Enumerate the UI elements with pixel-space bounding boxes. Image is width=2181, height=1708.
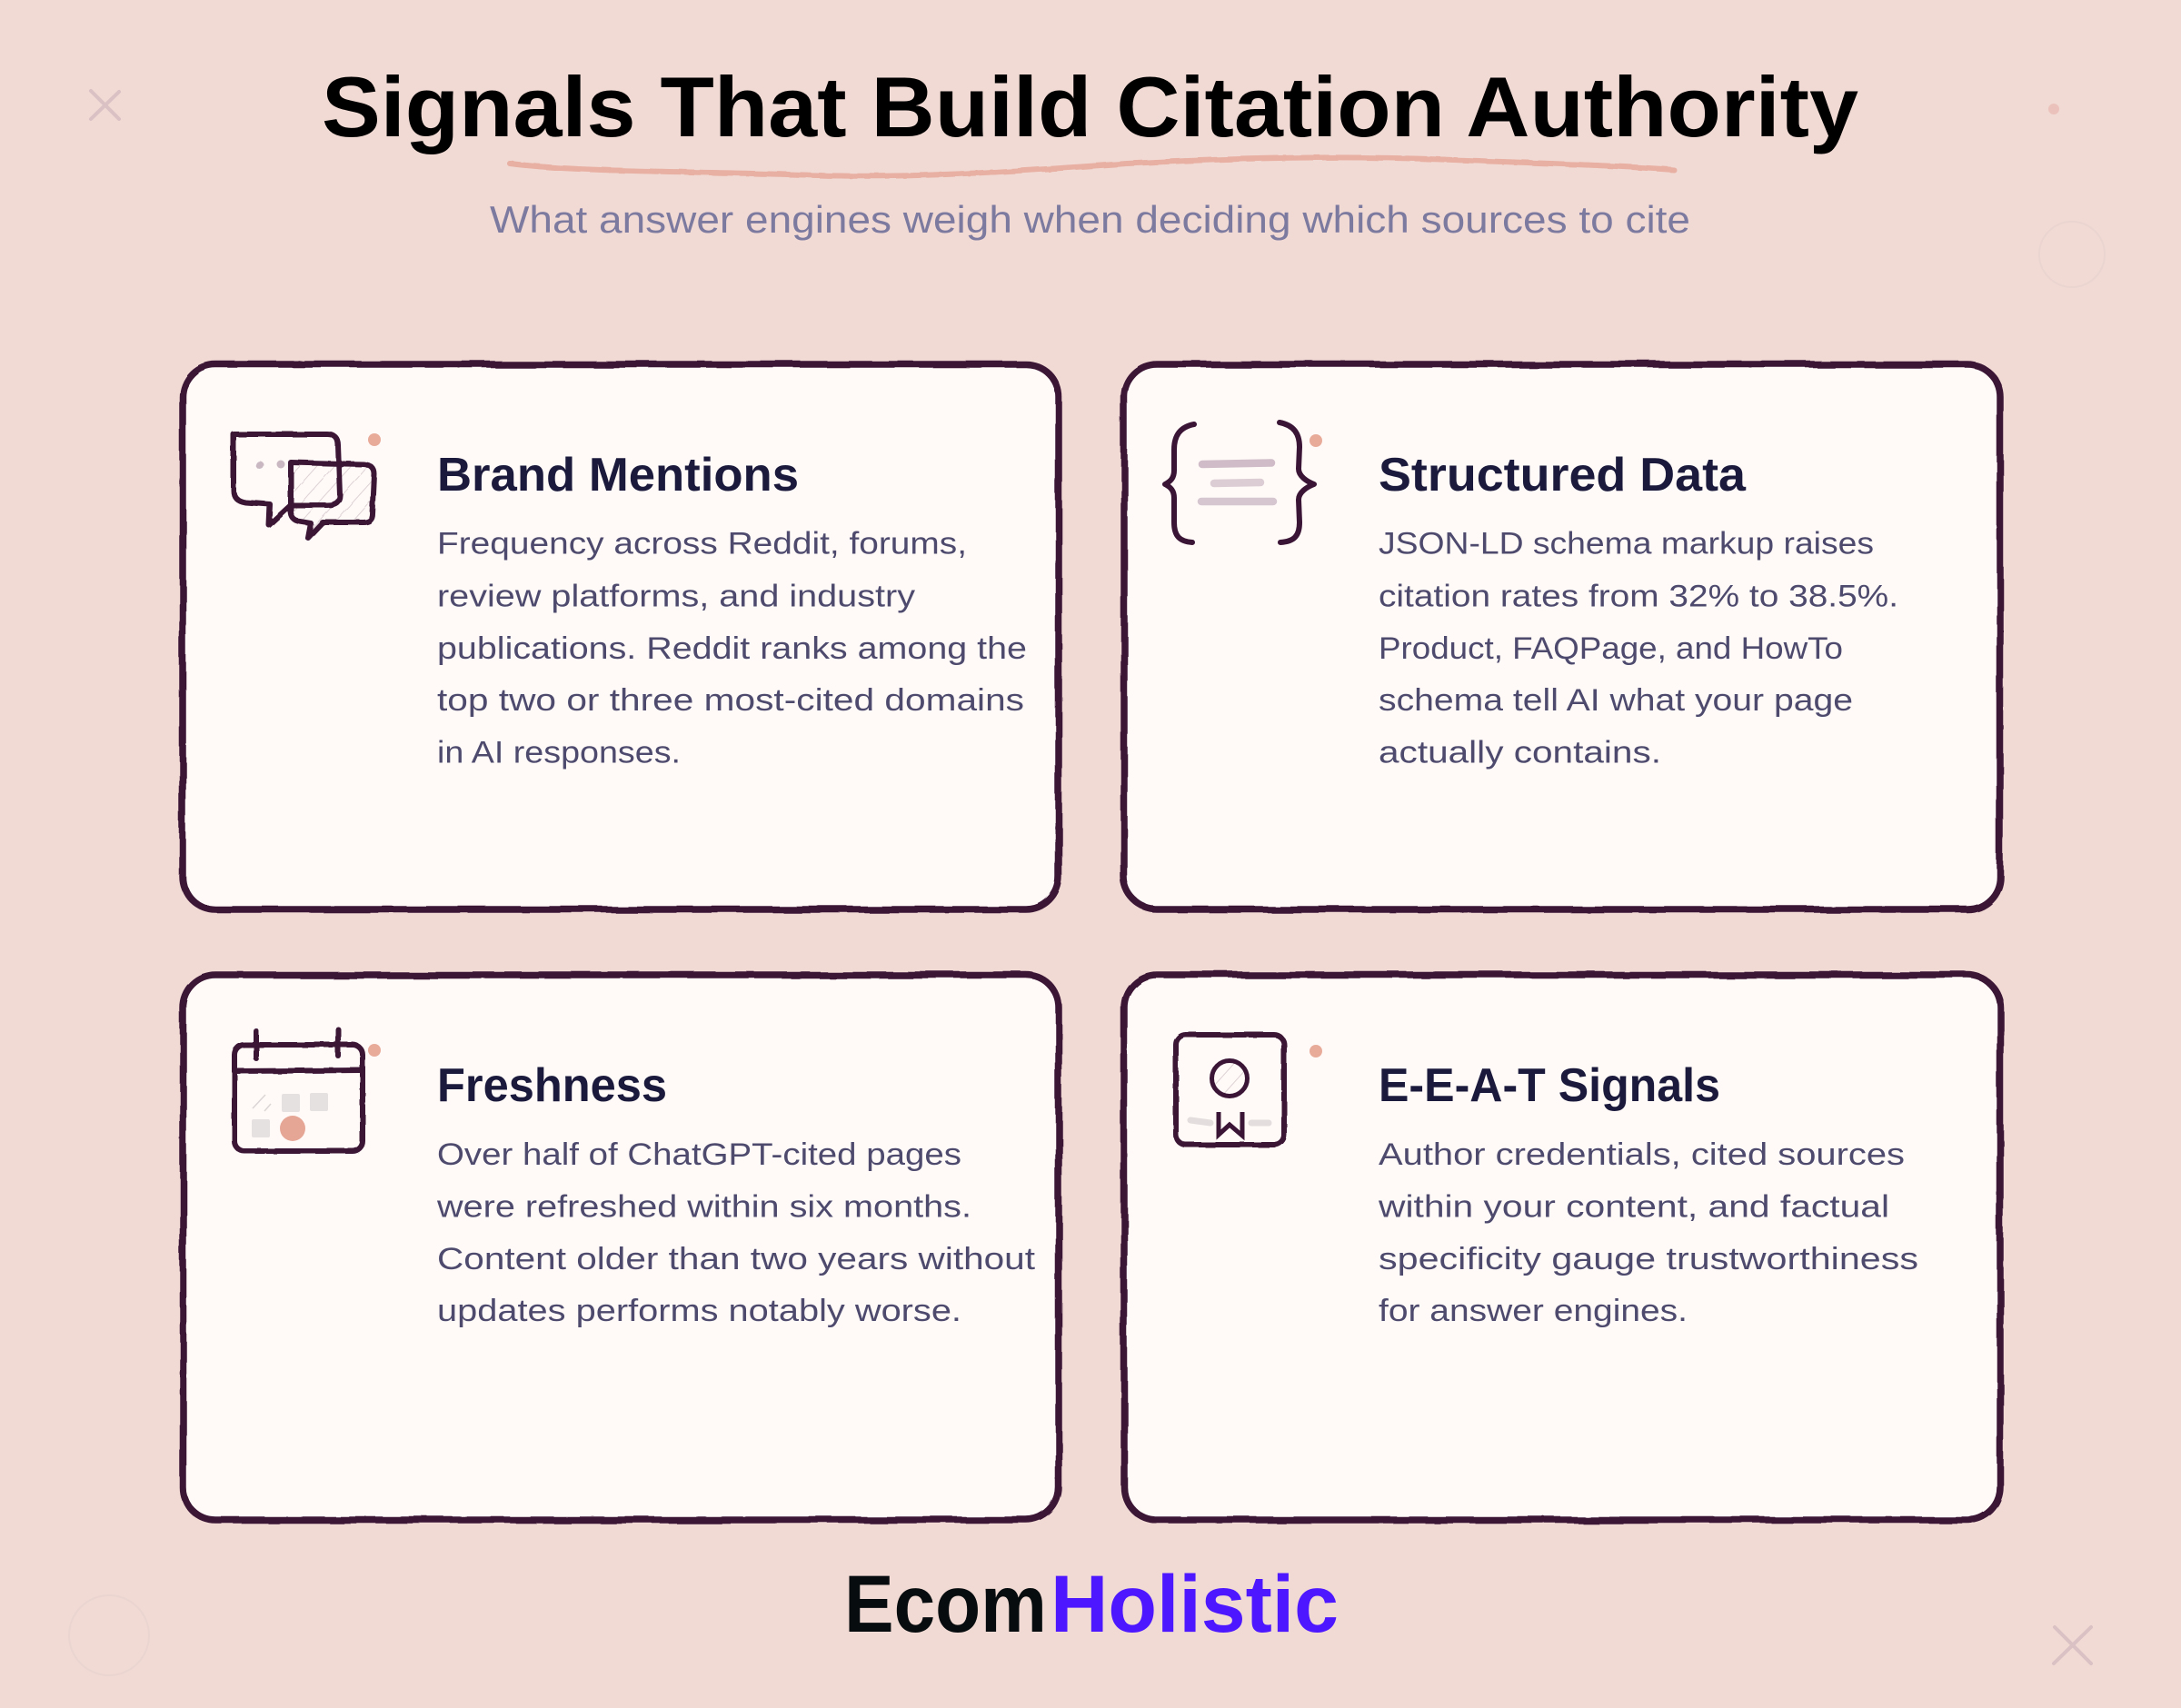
panel: e-e-a-t signals [1124,975,2000,1520]
body text [437,527,1027,770]
body text: Product, FAQPage, and HowTo [1379,631,1843,666]
title: Signals That Build Citation Authority [322,59,1858,154]
accent dot [368,433,381,446]
body text: Frequency across Reddit, forums, [437,527,967,561]
panel: freshness [183,975,1059,1520]
body text: top two or three most-cited domains [437,683,1024,718]
brand logo [844,1558,1339,1649]
body text: for answer engines. [1379,1294,1688,1328]
body text: in AI responses. [437,736,681,770]
icon: calendar [234,1029,363,1151]
subtitle: What answer engines weigh when deciding which sources to cite [490,198,1690,241]
body text: Over half of ChatGPT-cited pages [437,1137,961,1172]
body text: were refreshed within six months. [436,1190,971,1225]
accent dot [368,1044,381,1057]
body text: publications. Reddit ranks among the [437,631,1027,666]
brand logo: Holistic [1051,1558,1339,1649]
panel: brand mentions [183,364,1059,909]
heading: Structured Data [1379,449,1747,501]
card outline [183,975,1059,1520]
body text [436,1137,1035,1328]
body text: review platforms, and industry [437,580,916,614]
decoration: top-left cross [91,91,119,119]
body text: citation rates from 32% to 38.5%. [1379,580,1898,614]
body text: actually contains. [1379,736,1661,770]
decoration: bottom-left ring [69,1595,149,1675]
body text: schema tell AI what your page [1379,683,1853,718]
body text [1378,1137,1918,1328]
heading: Freshness [437,1059,667,1112]
accent dot [1310,434,1322,447]
body text: within your content, and factual [1378,1190,1889,1225]
icon: curly braces with lines [1165,422,1314,542]
card outline [1124,364,2000,909]
brand logo: Ecom [844,1558,1047,1649]
card outline [183,364,1059,909]
decoration: top-right dot [2048,104,2059,114]
heading: E-E-A-T Signals [1379,1059,1720,1112]
body text: Author credentials, cited sources [1379,1137,1905,1172]
accent dot [1310,1045,1322,1058]
body text: updates performs notably worse. [437,1294,961,1328]
body text: JSON-LD schema markup raises [1379,527,1874,561]
panel: structured data [1124,364,2000,909]
decoration: top-right ring [2039,222,2105,287]
body text: specificity gauge trustworthiness [1379,1242,1918,1276]
icon: certificate [1176,1035,1284,1145]
icon: speech bubbles [234,434,374,538]
heading: Brand Mentions [437,449,799,501]
decoration: bottom-right cross [2054,1627,2091,1663]
card outline [1124,975,2000,1520]
title underline [510,157,1674,176]
body text [1379,527,1898,770]
body text: Content older than two years without [437,1242,1035,1276]
